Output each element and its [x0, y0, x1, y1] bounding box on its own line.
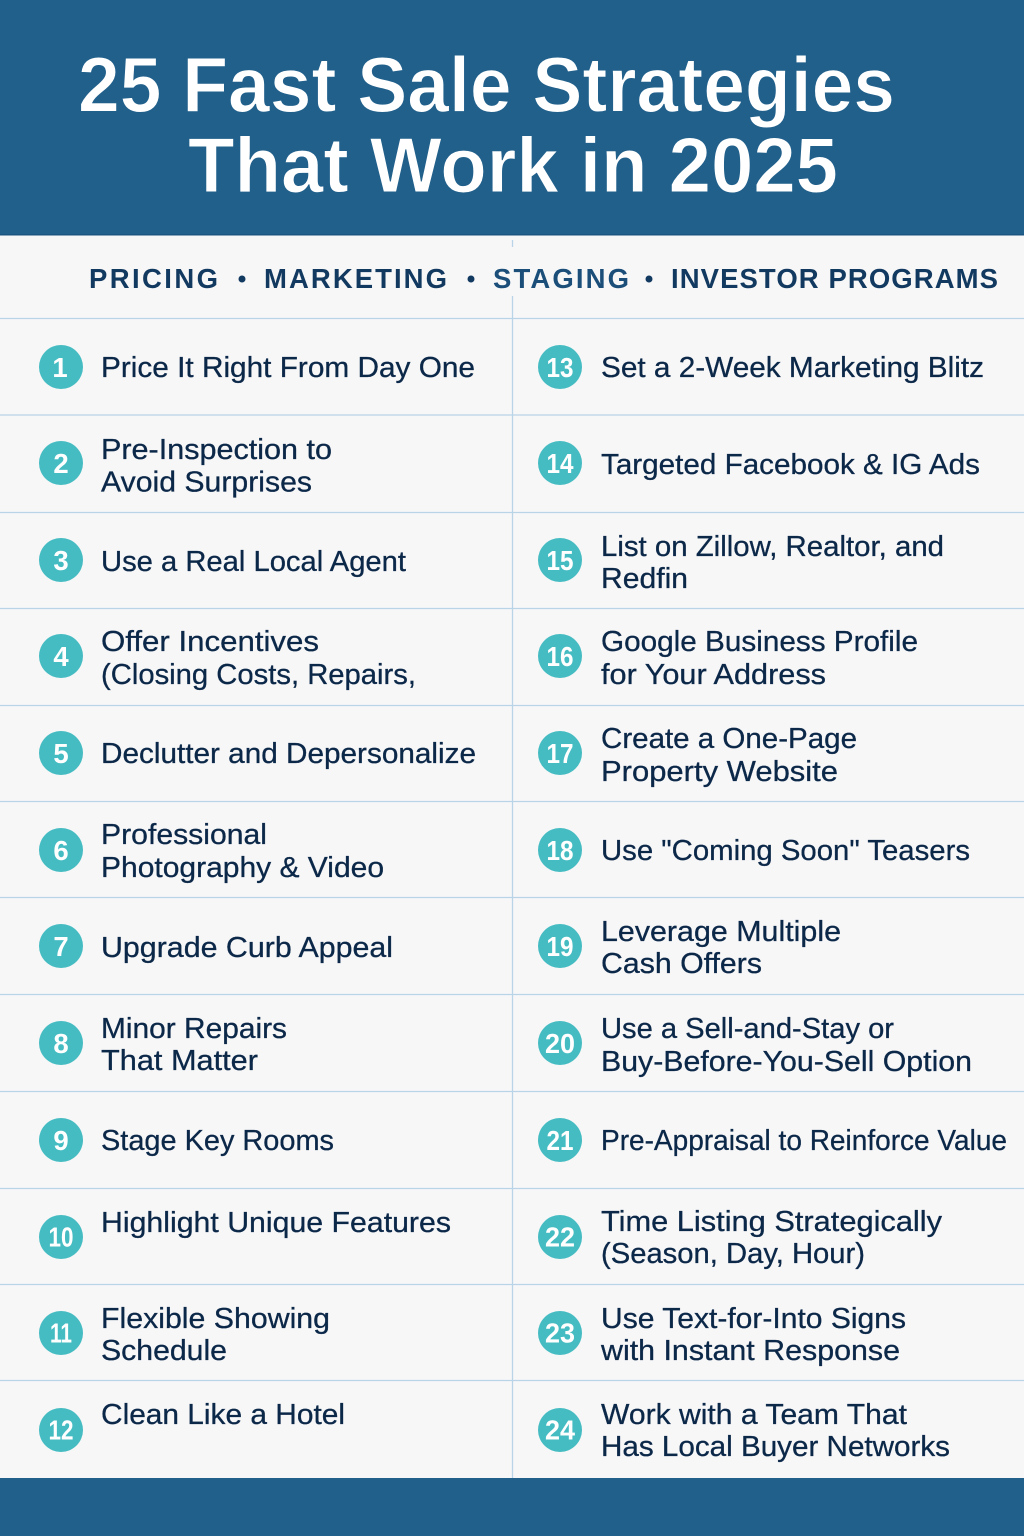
item 4: Offer Incentives [101, 626, 319, 658]
item 11: 11 [50, 1318, 72, 1348]
item 12: Clean Like a Hotel [101, 1399, 345, 1431]
item 8: 8 [53, 1028, 69, 1059]
item 9: 9 [53, 1125, 69, 1156]
item 24: Has Local Buyer Networks [601, 1431, 950, 1463]
item 23 [538, 1303, 906, 1367]
item 19 [538, 916, 841, 980]
item 16: for Your Address [601, 659, 826, 691]
item 11: Schedule [101, 1335, 227, 1367]
item 23: Use Text-for-Into Signs [601, 1303, 906, 1335]
item 5: 5 [53, 738, 69, 769]
item 4 [39, 626, 416, 691]
item 17: Property Website [601, 756, 838, 788]
item 22 [538, 1206, 943, 1270]
item 20: Buy-Before-You-Sell Option [601, 1046, 972, 1078]
item 19: 19 [546, 931, 574, 962]
item 15: List on Zillow, Realtor, and [601, 531, 944, 563]
item 21 [538, 1118, 1007, 1162]
item 7 [39, 924, 393, 968]
item 24: Work with a Team That [601, 1399, 907, 1431]
item 5 [39, 731, 476, 775]
item 4: (Closing Costs, Repairs, [101, 659, 416, 691]
item 14: Targeted Facebook & IG Ads [601, 449, 980, 481]
item 18: 18 [546, 835, 574, 866]
item 6 [39, 819, 384, 884]
item 19: Cash Offers [601, 948, 762, 980]
title [78, 40, 895, 209]
item 4: 4 [53, 641, 69, 672]
item 23: 23 [545, 1318, 575, 1348]
item 1 [39, 345, 475, 389]
item 18: Use "Coming Soon" Teasers [601, 835, 970, 867]
subtitle: category strip: STAGING [493, 263, 629, 294]
item 17: Create a One-Page [601, 723, 857, 755]
item 10: 10 [48, 1222, 74, 1252]
subtitle: category strip [89, 263, 998, 294]
item 21: Pre-Appraisal to Reinforce Value [601, 1125, 1007, 1157]
subtitle: category strip: INVESTOR PROGRAMS [671, 263, 998, 294]
item 5: Declutter and Depersonalize [101, 738, 476, 770]
item 1: 1 [52, 352, 68, 383]
item 20: 20 [545, 1028, 575, 1059]
item 3: 3 [53, 545, 69, 576]
item 1: Price It Right From Day One [101, 352, 475, 384]
strategy list: left column [39, 345, 476, 1452]
item 24 [538, 1399, 950, 1463]
item 11: Flexible Showing [101, 1303, 330, 1335]
item 18 [538, 828, 970, 872]
item 19: Leverage Multiple [601, 916, 841, 948]
item 15: 15 [546, 545, 574, 576]
item 3: Use a Real Local Agent [101, 546, 406, 578]
item 22: (Season, Day, Hour) [601, 1238, 865, 1270]
item 7: 7 [53, 931, 69, 962]
subtitle: category strip: MARKETING [264, 263, 447, 294]
item 2 [39, 434, 332, 498]
item 2: Avoid Surprises [101, 466, 312, 498]
item 6: Photography & Video [101, 852, 384, 884]
item 8 [39, 1013, 287, 1077]
item 3 [39, 538, 406, 582]
item 15: Redfin [601, 563, 688, 595]
item 10 [39, 1207, 451, 1259]
item 17: 17 [546, 738, 574, 769]
item 20 [538, 1013, 972, 1078]
item 16: Google Business Profile [601, 626, 918, 658]
item 11 [39, 1303, 330, 1367]
item 14 [538, 441, 980, 485]
item 22: Time Listing Strategically [601, 1206, 943, 1238]
item 23: with Instant Response [600, 1335, 900, 1367]
item 22: 22 [545, 1222, 575, 1252]
header band with title [0, 0, 1024, 236]
item 13: Set a 2-Week Marketing Blitz [601, 352, 984, 384]
item 21: 21 [546, 1125, 574, 1156]
item 14: 14 [546, 448, 574, 479]
item 13: 13 [546, 352, 574, 383]
item 2: 2 [53, 448, 69, 479]
item 8: That Matter [101, 1045, 258, 1077]
item 10: Highlight Unique Features [101, 1207, 451, 1239]
title: 25 Fast Sale Strategies [78, 40, 895, 128]
footer band [0, 1478, 1024, 1536]
item 7: Upgrade Curb Appeal [101, 932, 393, 964]
item 16: 16 [546, 641, 574, 672]
item 20: Use a Sell-and-Stay or [601, 1013, 894, 1045]
item 6: 6 [53, 835, 69, 866]
item 6: Professional [101, 819, 267, 851]
item 9: Stage Key Rooms [101, 1125, 334, 1157]
item 15 [538, 531, 944, 595]
item 16 [538, 626, 918, 691]
item 12: 12 [48, 1414, 74, 1446]
item 13 [538, 345, 984, 389]
item 9 [39, 1118, 334, 1162]
item 17 [538, 723, 857, 788]
title: That Work in 2025 [188, 121, 838, 209]
item 24: 24 [545, 1414, 576, 1446]
item 12 [39, 1399, 345, 1452]
item 2: Pre-Inspection to [101, 434, 332, 466]
subtitle: category strip: PRICING [89, 263, 218, 294]
item 8: Minor Repairs [101, 1013, 287, 1045]
strategy list: right column [538, 345, 1007, 1463]
